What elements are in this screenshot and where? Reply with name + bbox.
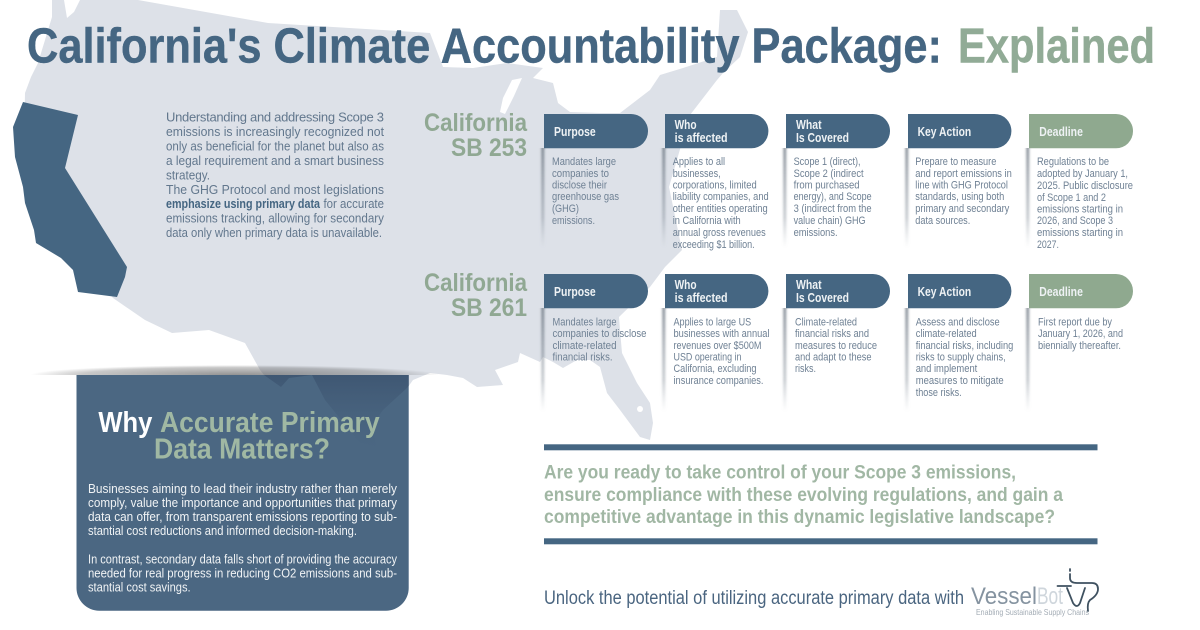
card: SB 253 who is affected: other entities operating: [673, 203, 768, 215]
card: SB 253 who is affected: Applies to all: [673, 156, 725, 168]
callout: call to action: ensure compliance with these evolving regulations, and gain a: [544, 484, 1063, 506]
card: SB 253 purpose: emissions.: [552, 215, 595, 227]
card: SB 261 what is covered: financial risks and: [795, 328, 869, 340]
card: SB 253 purpose: [542, 114, 648, 248]
card: SB 261 deadline: [1026, 274, 1133, 412]
callout: call to action: competitive advantage in this dynamic legislative landscape?: [544, 506, 1055, 528]
card: SB 253 deadline: emissions starting in: [1037, 227, 1123, 239]
intro text block: only as beneficial for the planet but also as: [166, 138, 384, 154]
card: SB 261 who is affected: businesses with annual: [674, 328, 770, 340]
card: SB 261 who is affected: California, excluding: [674, 363, 756, 375]
card: SB 261 deadline: biennially thereafter.: [1038, 340, 1121, 352]
card: SB 261 key action: [906, 274, 1013, 412]
card: SB 261 purpose: [542, 274, 648, 412]
card: SB 261 what is covered: [784, 274, 890, 412]
background map of the United States: [23, 0, 748, 447]
card: SB 261 what is covered: risks.: [795, 363, 816, 375]
card: SB 253 what is covered: Is Covered: [796, 131, 849, 145]
card: SB 253 what is covered: Scope 2 (indirect: [794, 168, 864, 180]
panel: why accurate primary data matters: [38, 366, 432, 611]
card: SB 253 who is affected: businesses,: [673, 168, 721, 180]
card: SB 261 key action: climate-related: [916, 328, 977, 340]
card: SB 261 key action: Key Action: [918, 285, 971, 299]
intro text block: The GHG Protocol and most legislations: [166, 182, 384, 197]
card: SB 261 what is covered: Climate-related: [795, 316, 857, 328]
callout: call to action: Are you ready to take control of your Scope 3 emissions,: [544, 462, 1016, 484]
card: SB 261 what is covered: What: [796, 278, 822, 292]
card: SB 253 what is covered: What: [796, 118, 822, 132]
intro text block: strategy.: [166, 168, 210, 182]
card: SB 253 what is covered: 3 (indirect from the: [794, 203, 872, 215]
card: SB 261 who is affected: Applies to large US: [674, 316, 752, 328]
card: SB 253 what is covered: from purchased: [794, 180, 860, 192]
panel heading: Data Matters?: [154, 434, 330, 466]
card: SB 253 key action: data sources.: [915, 215, 970, 227]
card: SB 253 what is covered: emissions.: [794, 227, 838, 239]
heading: California SB 261: SB 261: [451, 294, 527, 322]
panel body text: data can offer, from transparent emissions reporting to sub-: [88, 509, 397, 524]
heading: California SB 253: [424, 109, 528, 162]
logo: VesselBot: Enabling Sustainable Supply Chains: [976, 607, 1089, 617]
card: SB 253 who is affected: is affected: [675, 131, 728, 145]
card: SB 253 who is affected: Who: [675, 118, 697, 132]
title: California's Climate Accountability Package:: [27, 20, 942, 74]
card: SB 253 purpose: Purpose: [554, 125, 596, 139]
card: SB 261 who is affected: Who: [675, 278, 697, 292]
card: SB 253 deadline: Regulations to be: [1037, 156, 1109, 168]
heading: California SB 253: California: [424, 109, 528, 137]
card: SB 253 deadline: of Scope 1 and 2: [1037, 192, 1106, 204]
card: SB 253 what is covered: [784, 114, 890, 248]
intro text block: data only when primary data is unavailable.: [166, 225, 382, 240]
card: SB 261 what is covered: Is Covered: [796, 291, 849, 305]
card: SB 253 deadline: adopted by January 1,: [1037, 168, 1128, 180]
logo: VesselBot: Vessel: [971, 583, 1037, 610]
panel heading: [98, 407, 380, 466]
panel body text: Businesses aiming to lead their industry rather than merely: [88, 481, 397, 496]
card: SB 253 who is affected: corporations, limited: [673, 180, 757, 192]
card: SB 261 deadline: January 1, 2026, and: [1038, 328, 1123, 340]
card: SB 261 who is affected: is affected: [675, 291, 728, 305]
card: SB 261 key action: measures to mitigate: [916, 375, 1004, 387]
panel body text: stantial cost savings.: [88, 580, 191, 595]
card: SB 253 deadline: 2026, and Scope 3: [1037, 215, 1113, 227]
heading: California SB 253: SB 253: [451, 134, 527, 162]
intro text block: emphasize using primary data: [166, 196, 321, 211]
intro text block: emissions tracking, allowing for secondary: [166, 210, 384, 226]
card: SB 253 what is covered: Scope 1 (direct),: [794, 156, 861, 168]
card: SB 253 purpose: greenhouse gas: [552, 191, 619, 203]
card: SB 253 who is affected: in California with: [673, 215, 741, 227]
card: SB 253 what is covered: energy), and Scope: [794, 191, 872, 203]
card: SB 253 purpose: companies to: [552, 168, 609, 180]
card row: SB 261: [542, 274, 1133, 412]
card: SB 253 key action: Prepare to measure: [915, 156, 996, 168]
card row: SB 253: [542, 114, 1133, 251]
logo: VesselBot: [971, 569, 1098, 617]
heading: California SB 261: [424, 269, 528, 322]
intro text block: a legal requirement and a smart business: [166, 153, 384, 168]
card: SB 253 deadline: Deadline: [1039, 125, 1083, 139]
icon: VesselBot pipeline mark: [1058, 569, 1098, 611]
card: SB 261 what is covered: and adapt to these: [795, 352, 872, 364]
card: SB 261 key action: risks to supply chains,: [916, 352, 1006, 364]
intro text block: emissions is increasingly recognized not: [166, 124, 384, 139]
card: SB 253 key action: primary and secondary: [915, 203, 1010, 215]
panel body text: stantial cost reductions and informed decision-making.: [88, 523, 357, 538]
card: SB 253 key action: line with GHG Protocol: [915, 180, 1008, 192]
intro text block: Understanding and addressing Scope 3: [166, 110, 384, 124]
card: SB 253 key action: [906, 114, 1012, 248]
panel body text: [88, 481, 397, 595]
panel body text: comply, value the importance and opportunities that primary: [88, 495, 397, 510]
card: SB 261 deadline: Deadline: [1039, 285, 1083, 299]
card: SB 253 deadline: emissions starting in: [1037, 204, 1123, 216]
panel heading: Accurate Primary: [160, 407, 380, 439]
card: SB 253 who is affected: liability companies, and: [673, 191, 769, 203]
intro text block: for accurate: [324, 196, 384, 211]
heading: California SB 261: California: [424, 269, 528, 297]
card: SB 261 who is affected: insurance companies.: [674, 375, 764, 387]
card: SB 253 deadline: 2027.: [1037, 239, 1059, 251]
logo: VesselBot: Bot: [1037, 583, 1063, 610]
panel heading: Why: [98, 407, 152, 439]
card: SB 261 who is affected: USD operating in: [674, 352, 742, 364]
intro text block: [166, 110, 384, 240]
card: SB 261 purpose: financial risks.: [552, 352, 612, 364]
card: SB 253 who is affected: exceeding $1 billion.: [673, 239, 755, 251]
card: SB 253 who is affected: [662, 114, 769, 251]
card: SB 261 key action: and implement: [916, 363, 978, 375]
card: SB 253 purpose: (GHG): [552, 203, 579, 215]
card: SB 253 purpose: disclose their: [552, 180, 607, 192]
card: SB 261 purpose: climate-related: [552, 340, 616, 352]
card: SB 261 deadline: First report due by: [1038, 316, 1112, 328]
panel body text: In contrast, secondary data falls short of providing the accuracy: [88, 552, 397, 567]
card: SB 261 purpose: companies to disclose: [552, 328, 646, 340]
card: SB 253 key action: standards, using both: [915, 191, 1004, 203]
card: SB 253 who is affected: annual gross revenues: [673, 227, 766, 239]
card: SB 261 key action: financial risks, including: [916, 340, 1013, 352]
panel body text: needed for real progress in reducing CO2 emissions and sub-: [88, 566, 397, 581]
callout: call to action: [544, 444, 1098, 544]
icon: California state shape: [13, 102, 127, 297]
card: SB 261 purpose: Purpose: [554, 285, 596, 299]
card: SB 253 purpose: Mandates large: [552, 156, 616, 168]
card: SB 253 what is covered: value chain) GHG: [794, 215, 866, 227]
title: Explained: [958, 20, 1155, 74]
card: SB 261 who is affected: [662, 274, 770, 412]
text: unlock the potential: Unlock the potential of utilizing accurate primary data with: [544, 588, 964, 609]
card: SB 253 key action: and report emissions in: [915, 168, 1012, 180]
card: SB 253 key action: Key Action: [918, 125, 971, 139]
card: SB 261 who is affected: revenues over $500M: [674, 340, 762, 352]
card: SB 261 what is covered: measures to reduce: [795, 340, 877, 352]
card: SB 261 key action: those risks.: [916, 387, 962, 399]
card: SB 253 deadline: [1026, 114, 1133, 251]
card: SB 261 purpose: Mandates large: [552, 316, 616, 328]
card: SB 261 key action: Assess and disclose: [916, 316, 1000, 328]
card: SB 253 deadline: 2025. Public disclosure: [1037, 180, 1133, 192]
